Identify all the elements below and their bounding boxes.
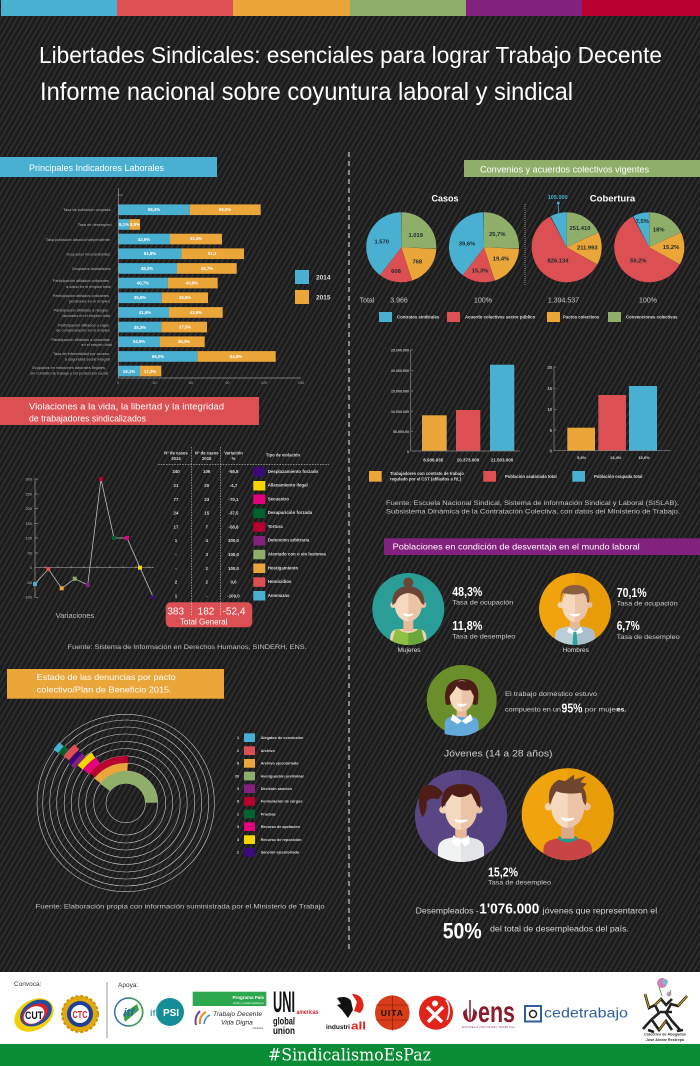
radial chart legend: Recurso de reposición xyxy=(261,838,302,842)
bar chart: porcentajes: 10 xyxy=(547,407,553,412)
heading: poblaciones: Poblaciones en condición de desventaja en el mundo laboral xyxy=(393,541,640,551)
line chart: variaciones: -100 xyxy=(24,594,33,600)
stacked bar chart: Tasa de informalidad por acceso xyxy=(53,351,109,356)
stacked bar chart: 18,1% xyxy=(123,369,135,374)
table: tipos de violación: Atentado con o sin lesiones xyxy=(268,552,327,556)
stacked bar chart: Participación afiliados a riesgos xyxy=(54,308,108,312)
table: tipos de violación: Desplazamiento forzado xyxy=(268,469,319,474)
text: trabajo doméstico: El trabajo doméstico estuvo xyxy=(505,691,597,698)
table: tipos de violación: Variación xyxy=(224,450,243,456)
table: tipos de violación: Nº de casos xyxy=(164,450,188,456)
stacked bar chart: Participación afiliados a cesantías xyxy=(51,337,110,342)
stacked bar chart: en el empleo total xyxy=(81,342,112,347)
table: tipos de violación: -70,1 xyxy=(228,497,239,502)
stacked bar chart: sin contrato de trabajo y sin protección social xyxy=(30,370,108,376)
radial chart legend: Recurso de apelación xyxy=(261,825,301,829)
table: tipos de violación: 1 xyxy=(175,594,178,598)
pie value labels: 768 xyxy=(412,260,423,266)
pie value labels: 19,4% xyxy=(493,256,509,262)
logo: industriALL xyxy=(326,994,366,1032)
text: trabajo doméstico: compuesto en un xyxy=(505,706,561,714)
logo: CUT xyxy=(8,992,60,1038)
line chart: variaciones: 250 xyxy=(26,492,33,496)
pie value labels: 39,6% xyxy=(459,241,475,247)
stacked bar chart: pensiones en el empleo xyxy=(69,298,110,304)
pie value labels: 18% xyxy=(653,227,665,233)
text: desempleados jóvenes: 1'076.000 xyxy=(479,901,539,918)
stacked bar chart: a salud en el empleo total xyxy=(66,284,111,289)
radial chart legend: 1 xyxy=(237,812,239,816)
totals row: 3.966 xyxy=(390,298,408,304)
logo: UITA: UITA xyxy=(381,1008,404,1018)
stacked bar chart: 8,9% xyxy=(130,222,140,227)
radial chart legend: 20 xyxy=(235,774,239,778)
heading: violaciones: de trabajadores sindicalizados xyxy=(29,414,146,424)
logo: trabajo decente xyxy=(193,992,266,1030)
heading: cobertura: Cobertura xyxy=(590,194,636,204)
logo: UNI global union: UNI xyxy=(273,986,295,1019)
table: tipos de violación: 7 xyxy=(205,524,208,530)
panel: estado de las denuncias xyxy=(4,669,325,925)
totals row: Total xyxy=(360,298,375,304)
legend: 2014 / 2015 xyxy=(295,270,331,304)
bar chart: trabajadores: 15.000.000 xyxy=(391,390,409,394)
source note: convenios: Fuente: Escuela Nacional Sindical, Sistema de información Sindical y Laboral (SISLAB), xyxy=(386,500,679,507)
table: tipos de violación: 2015 xyxy=(202,456,212,461)
table: tipos de violación: Nº de casos xyxy=(195,450,219,456)
stats: mujeres: 48,3% xyxy=(452,585,482,599)
logo: figura en círculo rojo xyxy=(419,996,453,1030)
radial chart legend: 1 xyxy=(237,736,239,740)
totals row: 1.394.537 xyxy=(548,298,579,304)
text: desempleados jóvenes: jóvenes que representaron el xyxy=(542,907,657,916)
table: tipos de violación: 2 xyxy=(175,580,178,584)
stacked bar chart: 37,5% xyxy=(179,324,191,330)
stacked bar chart: Participación afiliados cotizantes xyxy=(53,278,109,283)
logo: ITF: itf xyxy=(124,1007,135,1019)
pie chart: casos absolute xyxy=(377,223,426,272)
totals row xyxy=(360,298,657,304)
bar chart legend: regulado por el CST (afiliados a RL) xyxy=(390,476,462,481)
table: tipos de violación: 17 xyxy=(174,524,179,530)
title: Libertades Sindicales: esenciales para lograr Trabajo Decente xyxy=(39,42,662,68)
pie value labels: 1.019 xyxy=(408,233,424,239)
logo: UNI global union xyxy=(273,986,319,1037)
radial chart legend: Averiguación preliminar xyxy=(261,774,305,778)
stats: mujeres: Tasa de ocupación xyxy=(452,599,514,606)
logo: cedetrabajo xyxy=(525,1005,628,1022)
text: desempleados jóvenes: Desempleados - xyxy=(416,907,479,916)
label: hombres: Hombres xyxy=(563,647,590,654)
label: convoca: Convoca: xyxy=(14,981,42,988)
table: tipos de violación: 240 xyxy=(172,469,180,474)
radial chart legend: Sanción ejecutoriada xyxy=(261,851,300,855)
stacked bar chart: a seguridad social integral xyxy=(65,356,110,362)
radial chart legend: Formulación de cargos xyxy=(261,800,302,804)
stacked bar chart: 64,8% xyxy=(230,354,242,359)
heading: indicadores: Principales Indicadores Laborales xyxy=(29,163,164,173)
heading: poblaciones xyxy=(384,538,700,555)
footer: logos band xyxy=(0,972,700,1044)
line chart: variaciones: 200 xyxy=(26,506,33,511)
bar chart legend: Población asalariada total xyxy=(505,474,557,479)
pie chart: casos percent xyxy=(459,223,509,272)
line chart: variaciones: 50 xyxy=(28,550,33,556)
table: tipos de violación: -37,5 xyxy=(228,510,239,516)
stacked bar chart: 17,2% xyxy=(144,369,156,374)
logo: UNI global union: union xyxy=(273,1026,295,1037)
logo: colectivo de abogados: José Alvear Restrepo xyxy=(646,1038,685,1042)
table: tipos de violación: Homicidios xyxy=(268,579,292,584)
stats: jóvenes xyxy=(488,866,551,887)
stacked bar chart: 48,7% xyxy=(201,266,213,271)
line chart: variaciones: 150 xyxy=(26,521,33,526)
radial bar chart xyxy=(4,681,247,925)
table: tipos de violación: 21 xyxy=(174,483,179,488)
stats: mujeres: Tasa de desempleo xyxy=(452,633,516,640)
bar chart: trabajadores: 10.373.000 xyxy=(457,458,480,462)
bar chart: trabajadores: 20.000.000 xyxy=(391,369,409,373)
table: tipos de violación: 77 xyxy=(174,497,179,502)
table: tipos de violación: - xyxy=(175,566,177,571)
heading: denuncias xyxy=(7,669,224,699)
line chart: variaciones: 100 xyxy=(26,536,33,540)
divider xyxy=(106,982,108,1038)
heading: jóvenes: Jóvenes (14 a 28 años) xyxy=(444,749,552,760)
table: tipos de violación: 23 xyxy=(204,497,210,502)
text: desempleados jóvenes: 50% xyxy=(443,918,482,943)
stacked bar chart: Participación afiliados cotizantes xyxy=(53,293,109,298)
logo: PSI: ifi xyxy=(150,1008,158,1018)
logo: ITF xyxy=(115,998,143,1026)
line chart: variaciones xyxy=(24,476,155,600)
stacked bar chart: 58,4% xyxy=(148,207,160,212)
table: tipos de violación: 2 xyxy=(205,580,208,584)
heading: convenios xyxy=(464,160,700,177)
logo: ENS: ESCUELA NACIONAL SINDICAL xyxy=(462,1025,515,1029)
pie legend: Convenciones colectivas xyxy=(626,314,678,320)
bar chart: porcentajes: 5 xyxy=(550,428,553,433)
stacked bar chart: 120 xyxy=(261,381,267,385)
legend: 2014 / 2015: 2014 xyxy=(316,274,331,282)
stacked bar chart: 51,8% xyxy=(144,251,156,256)
bar chart: trabajadores: 50.000.00 xyxy=(393,430,409,434)
table: tipos de violación: Hostigamiento xyxy=(268,566,299,570)
dotted separator xyxy=(524,204,526,285)
icon: hombre joven xyxy=(522,768,614,865)
bar chart: porcentajes: 5,6% xyxy=(577,455,587,460)
logo: colectivo de abogados xyxy=(643,978,687,1042)
source note: denuncias: Fuente: Elaboración propia con información suministrada por el Ministerio de Trabajo xyxy=(36,903,325,910)
icon: hombre xyxy=(539,573,611,649)
stacked bar chart: 35,6% xyxy=(134,295,146,300)
stacked bar chart: 38,8% xyxy=(179,295,191,300)
stacked bar chart: 48,2% xyxy=(141,266,153,271)
bar chart: trabajadores: 25.000.000 xyxy=(391,348,409,352)
table: tipos de violación: 15 xyxy=(204,510,210,516)
bar chart: trabajadores: 8.936.935 xyxy=(423,458,444,462)
text: trabajo doméstico xyxy=(505,691,626,716)
table: tipos de violación: Tortura xyxy=(268,524,283,529)
title: Informe nacional sobre coyuntura laboral y sindical xyxy=(40,78,573,106)
bar chart: porcentajes: 15,6% xyxy=(638,455,650,460)
radial chart legend: 3 xyxy=(237,825,239,829)
table: tipos de violación: 100,0 xyxy=(228,552,240,557)
stacked bar chart: 40,7% xyxy=(137,280,149,286)
stats: jóvenes: 15,2% xyxy=(488,866,518,880)
chart caption: variaciones: Variaciones xyxy=(56,611,95,620)
text: trabajo doméstico: es. xyxy=(617,706,626,714)
pie value labels: 25,7% xyxy=(489,232,506,238)
table: tipos de violación: - xyxy=(175,552,177,557)
pie legend: Acuerdo colectivos sector público xyxy=(465,314,536,320)
text: trabajo doméstico: por mujer xyxy=(585,706,620,714)
stacked bar chart: Tasa de desempleo xyxy=(78,222,112,227)
logo: trabajo decente: Acción y unidad sindical por xyxy=(233,1002,264,1005)
logo: industriALL: all xyxy=(351,1020,366,1032)
stats: hombres: Tasa de desempleo xyxy=(617,634,680,641)
text: trabajo doméstico: 95% xyxy=(562,702,582,716)
table: tipos de violación: Amenazas xyxy=(268,593,290,598)
bar chart: trabajadores: 21.503.000 xyxy=(491,458,514,462)
table: tipos de violación: 2 xyxy=(205,566,208,571)
logo: PSI: PSI xyxy=(163,1008,179,1019)
icon: mujer joven xyxy=(415,770,507,867)
table: tipos de violación: -58,8 xyxy=(228,524,239,530)
table: tipos de violación: 3 xyxy=(205,552,208,557)
stats: hombres xyxy=(617,586,680,641)
pie value labels: 608 xyxy=(391,269,402,275)
stacked bar chart: 41,6% xyxy=(139,310,151,315)
stacked bar chart: 42,6% xyxy=(138,237,150,242)
legend: 2014 / 2015: 2015 xyxy=(316,294,331,302)
text: desempleados jóvenes: del total de desempleados del país. xyxy=(490,925,629,934)
icon: trabajadora doméstica xyxy=(427,665,497,736)
pie chart: cobertura absolute xyxy=(543,223,591,271)
logo: ENS xyxy=(462,996,515,1029)
table: tipos de violación: Detencion arbitraria xyxy=(268,538,310,542)
logo: trabajo decente: Trabajo Decente xyxy=(213,1011,262,1018)
radial chart legend: 3 xyxy=(237,787,239,791)
table: tipos de violación: Desaparición forzada xyxy=(268,510,313,515)
stacked bar chart: Ocupados inconsultantes xyxy=(66,252,110,256)
bar chart: porcentajes xyxy=(547,365,671,460)
table: tipos de violación: 20 xyxy=(204,483,210,488)
table: tipos de violación: 4 xyxy=(205,538,208,543)
logo: UNI global union: global xyxy=(273,1016,295,1028)
radial chart legend: 3 xyxy=(237,838,239,842)
stacked bar chart: Participación afiliados a cajas xyxy=(58,322,109,328)
callout: 105.000: 105.000 xyxy=(548,195,568,201)
stats: hombres: 6,7% xyxy=(617,619,640,633)
stacked bar chart: 42,4% xyxy=(190,236,202,241)
pie value labels: 1.570 xyxy=(374,240,389,246)
bar chart: trabajadores: 0 xyxy=(407,450,409,454)
line chart: variaciones: -50 xyxy=(26,580,33,585)
stacked bar chart: Ocupados asalariados xyxy=(72,266,111,271)
stacked bar chart: de compensación en el empleo xyxy=(56,328,110,332)
callout: 105.000 xyxy=(548,195,568,213)
stacked bar chart: Tasa de población ocupada xyxy=(63,207,111,212)
footer: hashtag band: #SindicalismoEsPaz xyxy=(268,1046,431,1064)
stacked bar chart: 9,1% xyxy=(119,222,129,227)
callout: total general: 182 xyxy=(198,606,215,618)
pie legend: Contratos sindicales xyxy=(397,314,440,320)
table: tipos de violación: -100,0 xyxy=(227,594,240,598)
radial chart legend: 2 xyxy=(237,749,239,753)
label: apoya: Apoya: xyxy=(118,982,138,989)
radial chart legend: Decisión sanción xyxy=(261,787,293,791)
pie value labels: 59,2% xyxy=(630,259,647,265)
pie value labels xyxy=(374,219,679,275)
callout: total general xyxy=(166,602,252,627)
bar chart: trabajadores xyxy=(391,348,520,462)
table: tipos de violación: % xyxy=(232,456,236,461)
stacked bar chart: 51,3 xyxy=(208,251,217,256)
heading: indicadores xyxy=(0,157,217,177)
table: tipos de violación: -4,7 xyxy=(230,483,238,488)
table: tipos de violación: -55,8 xyxy=(228,469,239,474)
logo: PSI xyxy=(150,998,184,1026)
table: tipos de violación: 300,0 xyxy=(228,538,240,543)
stats: hombres: 70,1% xyxy=(617,586,647,600)
line chart: variaciones: 0 xyxy=(30,565,33,570)
stacked bar chart xyxy=(30,188,304,385)
table: tipos de violación: 100,0 xyxy=(228,566,240,571)
logo: industriALL: industri xyxy=(326,1025,350,1031)
table: tipos de violación xyxy=(158,447,329,614)
stacked bar chart: 43,9% xyxy=(190,310,202,315)
bar chart: trabajadores: 10.000.000 xyxy=(391,410,409,414)
heading: convenios: Convenios y acuerdos colectivos vigentes xyxy=(480,164,650,174)
bar chart legend xyxy=(369,471,642,482)
panel: poblaciones en desventaja xyxy=(372,538,700,943)
stacked bar chart: 65,0% xyxy=(152,354,164,359)
totals row: 100% xyxy=(639,298,657,304)
logo: trabajo decente: Programa País xyxy=(232,995,264,1000)
logo: trabajo decente: Colombia xyxy=(252,1027,264,1030)
radial chart legend: 8 xyxy=(237,762,239,766)
table: tipos de violación: Secuestro xyxy=(268,496,289,502)
stacked bar chart: 36,3% xyxy=(178,339,190,344)
table: tipos de violación: Allanamiento Ilegal xyxy=(268,482,308,488)
logo: UITA xyxy=(375,995,410,1030)
table: tipos de violación: 24 xyxy=(174,510,179,516)
logo: trabajo decente: Vida Digna xyxy=(221,1020,253,1026)
bar chart: porcentajes: 20 xyxy=(547,365,553,370)
stats: mujeres xyxy=(452,585,516,640)
stacked bar chart: 59,0% xyxy=(219,207,231,212)
logo: ENS: ens xyxy=(478,996,515,1029)
radial chart legend: Pruebas xyxy=(261,812,276,816)
table: tipos de violación: 106 xyxy=(203,469,211,474)
logo: CTC: CTC xyxy=(72,1010,88,1021)
source note: convenios: Subsistema Dinámica de la Contratación Colectiva, con datos del Ministerio de Trabajo. xyxy=(386,509,680,516)
stacked bar chart: 90 xyxy=(225,381,230,385)
radial chart legend: 2 xyxy=(237,851,239,855)
heading: denuncias: colectivo/Plan de Beneficio 2015. xyxy=(37,684,172,694)
stacked bar chart: 60 xyxy=(189,381,193,385)
stacked bar chart: 34,5% xyxy=(133,339,145,344)
logo: CTC xyxy=(62,996,98,1032)
panel: violaciones xyxy=(0,397,329,651)
source note: violaciones: Fuente: Sistema de Información en Derechos Humanos, SINDERH, ENS. xyxy=(68,644,307,651)
stats: hombres: Tasa de ocupación xyxy=(617,600,678,607)
table: tipos de violación: Tipo de violación xyxy=(266,452,300,458)
logo: UNI global union: americas xyxy=(296,1009,319,1016)
bar chart legend: Trabajadores con contrato de trabajo xyxy=(390,471,464,476)
table: tipos de violación: 2014 xyxy=(171,456,181,461)
panel: principales indicadores laborales xyxy=(0,157,331,385)
pie value labels: 826.134 xyxy=(548,259,569,265)
bar chart legend: Población ocupada total xyxy=(594,474,642,479)
heading: violaciones xyxy=(0,397,259,425)
radial chart legend: Alegatos de conclusión xyxy=(261,736,304,740)
logo: colectivo de abogados: Colectivo de Abogados xyxy=(644,1032,686,1036)
pie value labels: 251.410 xyxy=(570,226,590,232)
callout: total general: 383 xyxy=(167,606,184,618)
heading: casos: Casos xyxy=(431,194,459,204)
central dashed divider xyxy=(348,152,350,950)
bar chart: porcentajes: 15 xyxy=(547,386,553,391)
stacked bar chart: Tasa población laboral independiente xyxy=(46,237,110,242)
stacked bar chart: 0 xyxy=(117,381,119,385)
table: tipos de violación: 0,0 xyxy=(230,580,237,584)
line chart: variaciones: 300 xyxy=(26,476,33,482)
pie value labels: 15,3% xyxy=(472,268,488,274)
stacked bar chart: 30 xyxy=(152,381,157,385)
stacked bar chart: 40,8% xyxy=(186,280,198,286)
top colour bar xyxy=(1,0,700,16)
bar chart: porcentajes: 13,4% xyxy=(610,455,622,460)
bar chart: porcentajes: 0 xyxy=(550,448,553,454)
radial chart legend: Archivo xyxy=(261,749,276,753)
heading: violaciones: Violaciones a la vida, la libertad y la integridad xyxy=(29,402,224,412)
stacked bar chart: 150 xyxy=(298,381,304,385)
stacked bar chart: laborales en el empleo total xyxy=(62,313,110,318)
panel: convenios y acuerdos colectivos xyxy=(360,160,700,516)
source note: convenios xyxy=(386,500,680,516)
table: tipos de violación: 1 xyxy=(175,538,178,543)
title xyxy=(39,42,662,106)
heading: denuncias: Estado de las denuncias por pacto xyxy=(37,672,176,682)
logo: cedetrabajo: cedetrabajo xyxy=(544,1005,628,1021)
pie legend xyxy=(379,312,678,322)
radial chart legend xyxy=(235,733,305,857)
stacked bar chart: Ocupados en relaciones laborales ilegales, xyxy=(32,365,106,370)
table: tipos de violación: - xyxy=(206,594,208,598)
footer: hashtag band xyxy=(0,1044,700,1066)
radial chart legend: 8 xyxy=(237,800,239,804)
pie chart: cobertura percent xyxy=(625,223,673,271)
callout: total general: Total General xyxy=(180,618,228,626)
pie value labels: 211.993 xyxy=(577,246,598,252)
logo: CUT: CUT xyxy=(25,1010,43,1022)
radial chart legend: Archivo ejecutoriado xyxy=(261,762,299,766)
stats: mujeres: 11,8% xyxy=(452,619,482,633)
icon: mujer xyxy=(372,573,444,649)
pie value labels: 7,5% xyxy=(636,219,649,225)
label: mujeres: Mujeres xyxy=(397,647,421,654)
stats: jóvenes: Tasa de desempleo xyxy=(488,880,551,887)
callout: total general: -52,4 xyxy=(223,606,246,618)
text: desempleados jóvenes xyxy=(416,901,657,943)
pie legend: Pactos colectivos xyxy=(563,314,600,320)
stacked bar chart: 35,3% xyxy=(134,325,146,330)
totals row: 100% xyxy=(474,298,492,304)
pie value labels: 15,2% xyxy=(663,245,679,251)
